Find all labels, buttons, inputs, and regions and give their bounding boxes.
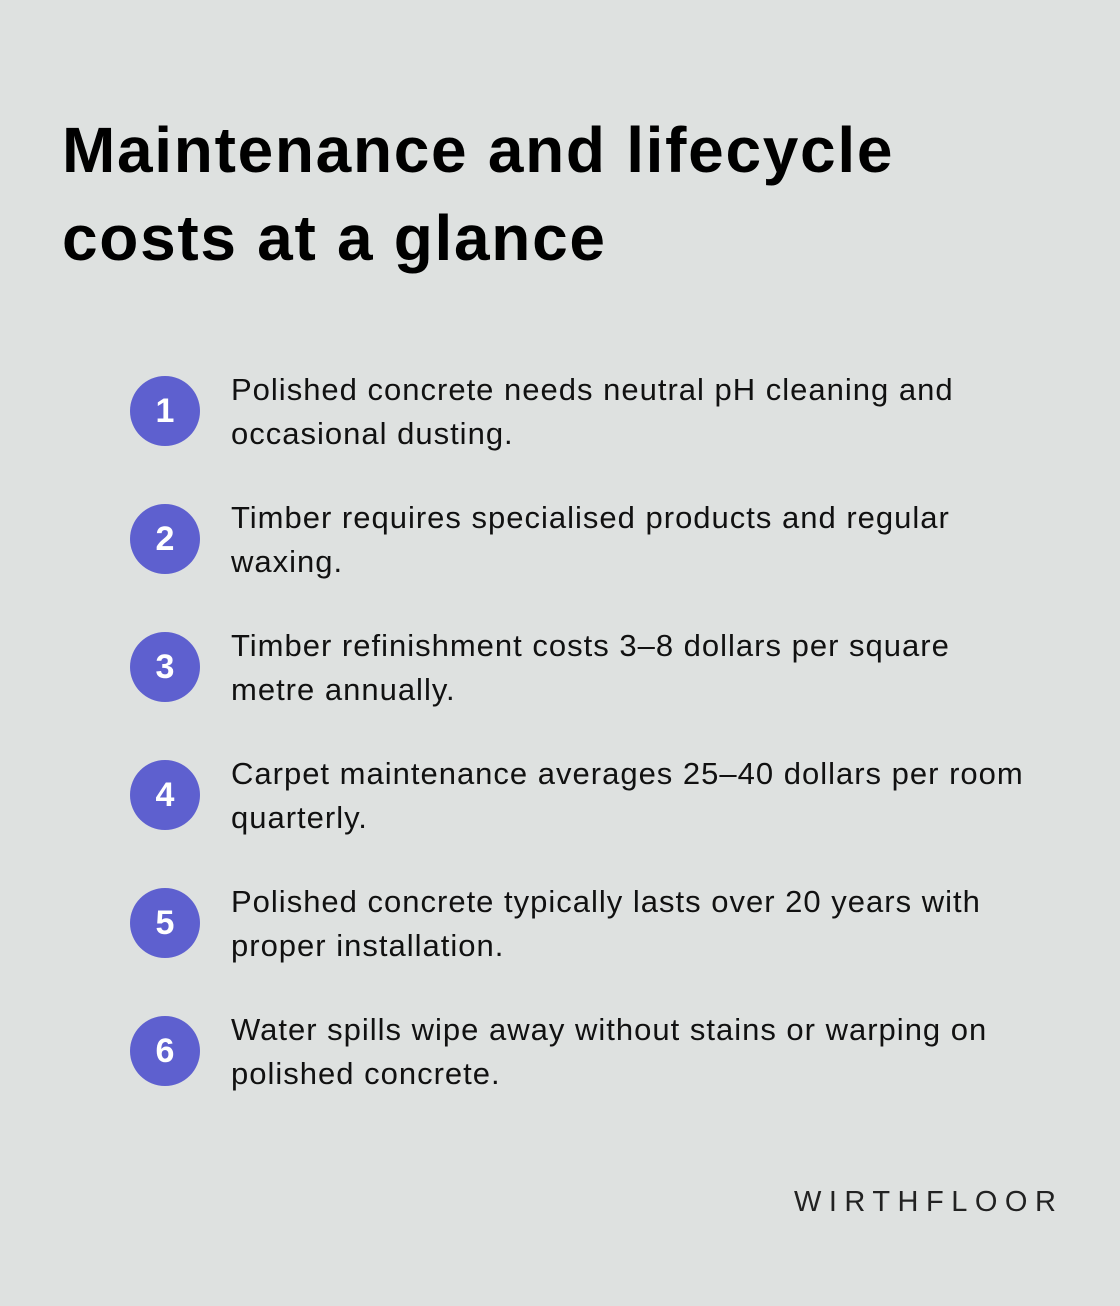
title: Maintenance and lifecycle — [62, 114, 894, 186]
item 4: 4 — [156, 776, 174, 814]
item 6: 6 — [156, 1032, 174, 1070]
item 3: Timber refinishment costs 3–8 dollars per square — [231, 628, 950, 663]
item 2: waxing. — [231, 544, 343, 579]
item 5: Polished concrete typically lasts over 20 years with — [231, 884, 981, 919]
item 4: quarterly. — [231, 800, 368, 835]
item 3 — [130, 628, 950, 707]
item 5 — [130, 884, 981, 963]
item 6: Water spills wipe away without stains or warping on — [231, 1012, 987, 1047]
item 1: occasional dusting. — [231, 416, 514, 451]
item 4 — [130, 756, 1024, 835]
title: costs at a glance — [62, 202, 607, 274]
item 2: Timber requires specialised products and regular — [231, 500, 950, 535]
item 4: Carpet maintenance averages 25–40 dollars per room — [231, 756, 1024, 791]
item 1: 1 — [156, 392, 174, 430]
item 5: proper installation. — [231, 928, 504, 963]
item 2 — [130, 500, 950, 579]
item 1 — [130, 372, 954, 451]
logo: WIRTHFLOOR — [794, 1186, 1063, 1218]
item 1: Polished concrete needs neutral pH cleaning and — [231, 372, 954, 407]
item 3: 3 — [156, 648, 174, 686]
title — [62, 114, 894, 274]
item 6: polished concrete. — [231, 1056, 501, 1091]
item 2: 2 — [156, 520, 174, 558]
item 5: 5 — [156, 904, 174, 942]
item 6 — [130, 1012, 987, 1091]
item 3: metre annually. — [231, 672, 456, 707]
